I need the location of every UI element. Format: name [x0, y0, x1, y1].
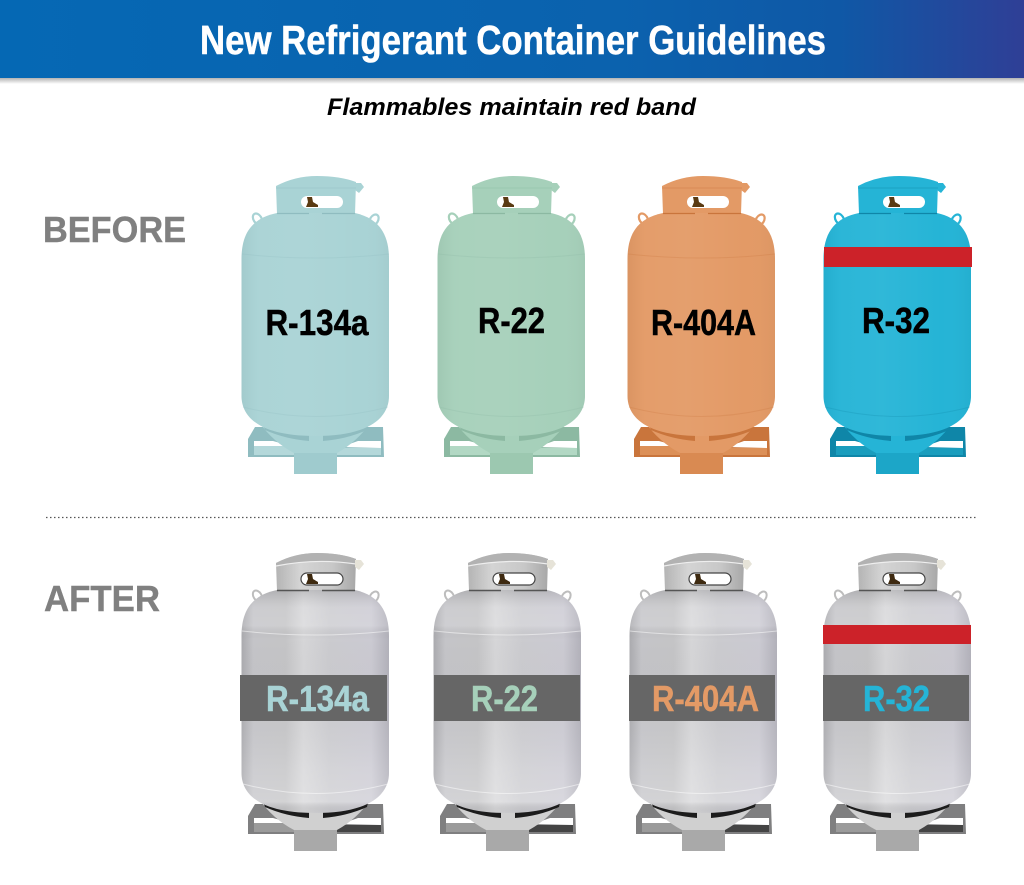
cylinder: R-134a before [242, 176, 389, 474]
red band [824, 247, 972, 267]
label: R-32: R-32 [863, 678, 930, 719]
cylinder: R-32 after [823, 553, 971, 851]
subtitle: Flammables maintain red band [327, 94, 697, 121]
title: New Refrigerant Container Guidelines [200, 17, 826, 63]
label: R-32: R-32 [862, 300, 930, 341]
label: R-134a: R-134a [266, 302, 369, 343]
label: R-404A: R-404A [651, 302, 756, 343]
label: R-22: R-22 [478, 300, 545, 341]
label: R-134a: R-134a [266, 678, 370, 719]
band: R-22 [434, 675, 580, 721]
header banner [0, 0, 1024, 84]
cylinder: R-134a after [240, 553, 389, 851]
cylinder: R-32 before [824, 176, 972, 474]
heading: after: AFTER [44, 578, 160, 619]
band: R-404A [629, 675, 775, 721]
band: R-134a [240, 675, 387, 721]
label: R-404A: R-404A [652, 678, 759, 719]
cylinder: R-22 after [434, 553, 581, 851]
cylinder: R-22 before [438, 176, 585, 474]
red band [823, 625, 971, 644]
heading: before: BEFORE [43, 209, 186, 250]
band: R-32 [823, 675, 969, 721]
label: R-22: R-22 [471, 678, 538, 719]
cylinder: R-404A before [628, 176, 775, 474]
cylinder: R-404A after [629, 553, 777, 851]
